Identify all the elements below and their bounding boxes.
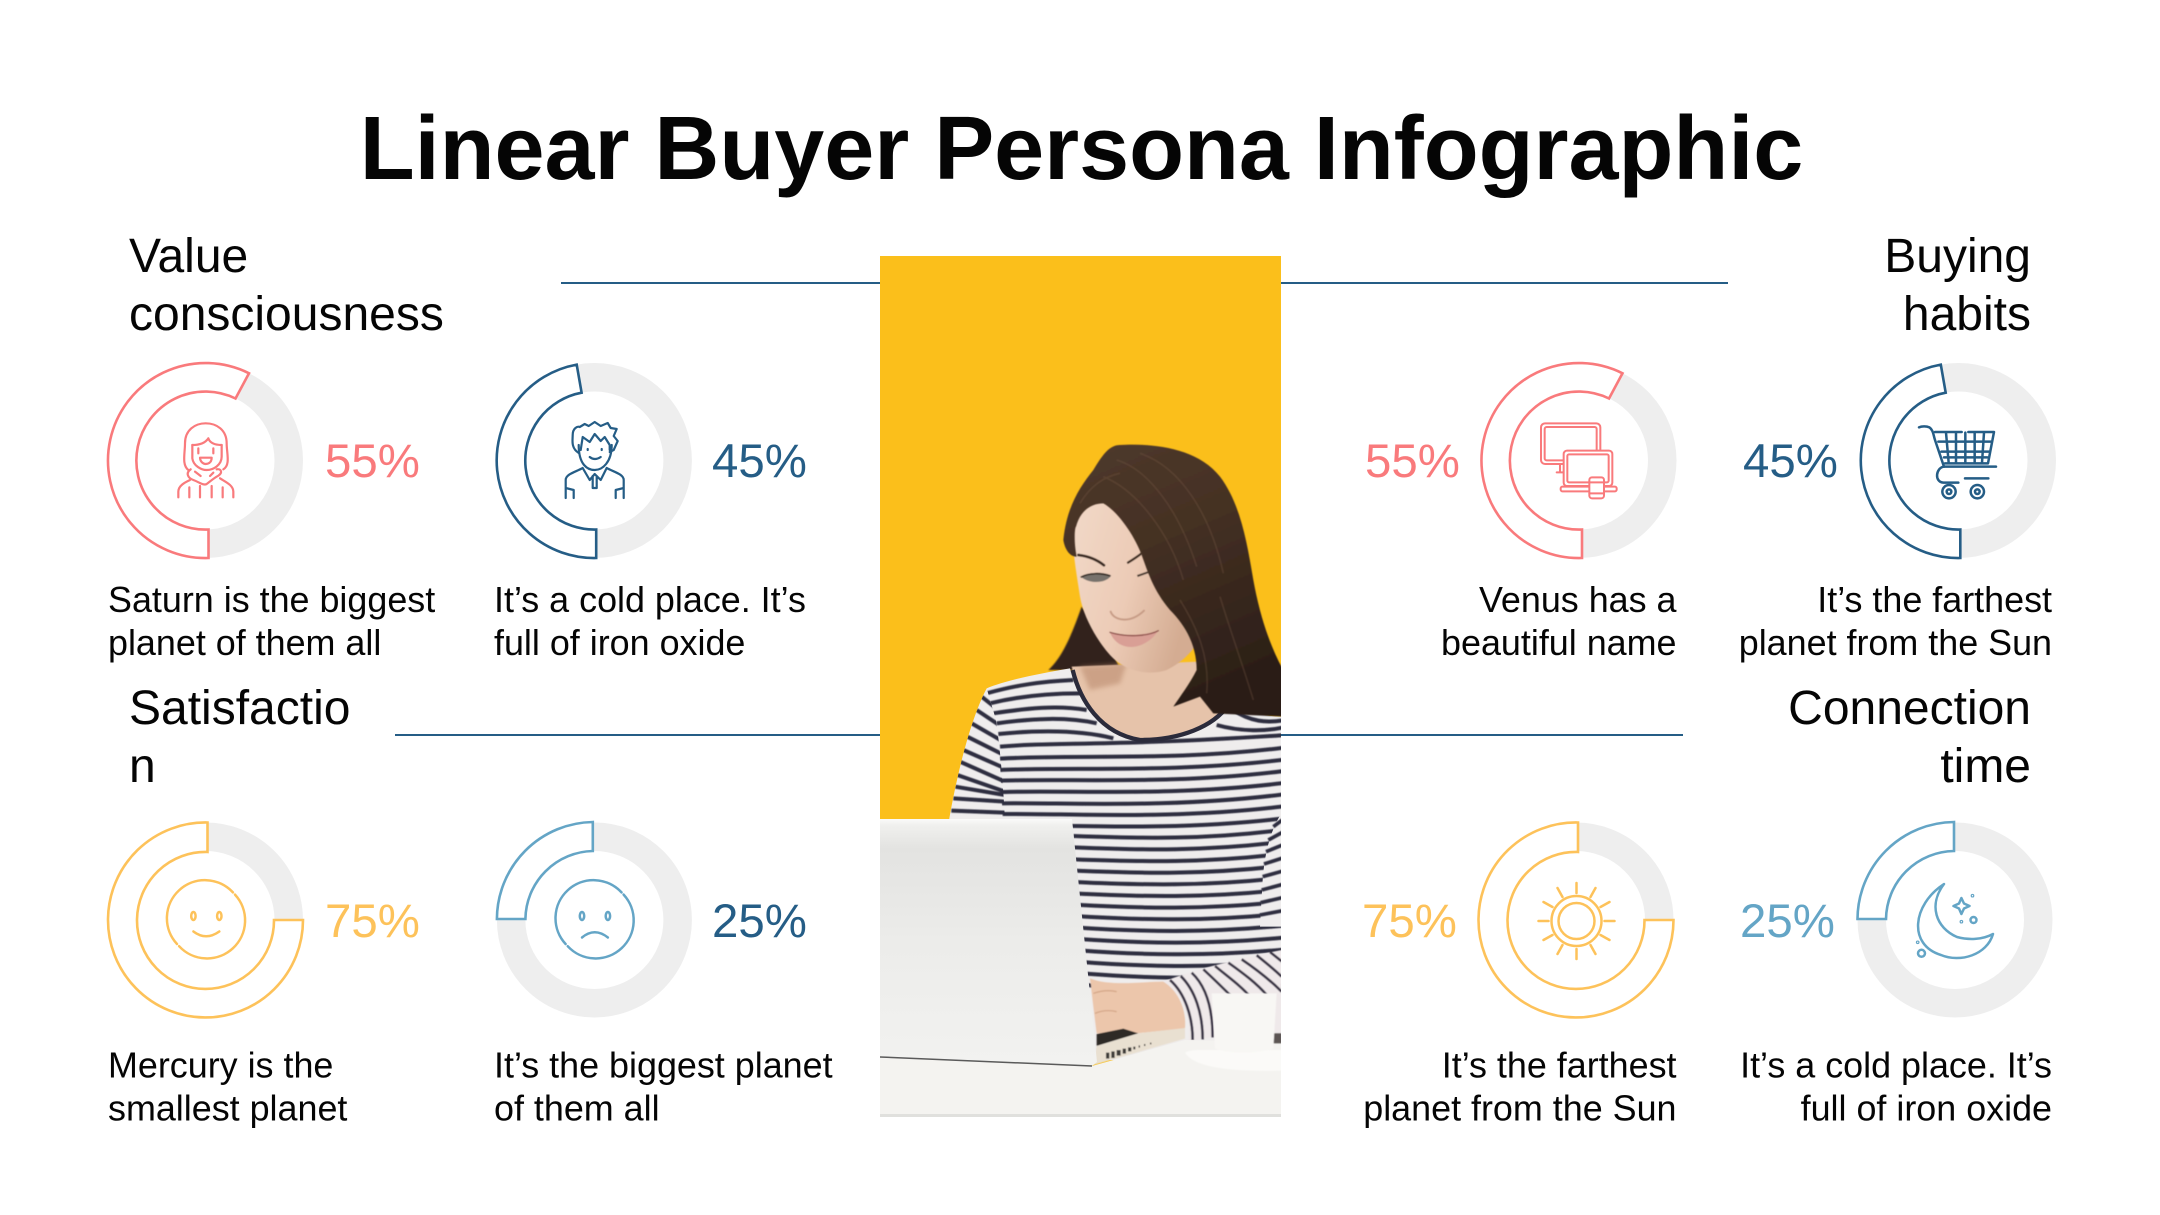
panel: value consciousness [108,230,880,663]
heading: buying habits [1884,230,2031,341]
donut: 25% sky [497,822,678,1003]
value: 55%: 55% [325,435,420,488]
description [1441,580,1677,663]
donut: 75% gold [108,822,303,1017]
icon: devices [1541,423,1617,498]
value: 55%: 55% [1365,435,1460,488]
icon: sun [1538,883,1614,959]
icon: smiling face [167,880,245,958]
photo: woman working at a laptop on yellow background [880,256,1287,1117]
icon: moon and stars [1917,884,1993,958]
value: 75%: 75% [325,895,420,948]
heading: satisfaction: Satisfactio [129,682,350,735]
description: planet from the Sun [1363,1088,1676,1128]
heading: connection time [1788,682,2031,793]
description: of them all [494,1088,660,1128]
description [108,580,435,663]
description: Mercury is the [108,1046,333,1086]
donut: 45% navy [1861,365,2042,558]
donut: 45% navy [497,365,678,558]
heading: satisfaction [129,682,350,793]
description: beautiful name [1441,623,1676,663]
icon: shopping cart [1919,426,1996,498]
heading: value consciousness [129,230,444,341]
donut: 75% gold [1478,822,1674,1017]
description [494,580,806,663]
description: planet of them all [108,623,381,663]
description: It’s a cold place. It’s [494,580,806,620]
description: planet from the Sun [1739,623,2052,663]
heading: buying habits: habits [1903,288,2031,341]
description: full of iron oxide [494,623,745,663]
connector line [561,282,880,284]
icon: woman [178,423,233,497]
description: It’s the biggest planet [494,1046,833,1086]
description: smallest planet [108,1088,347,1128]
value: 25%: 25% [1740,895,1835,948]
icon: man [566,422,624,498]
heading: buying habits: Buying [1884,230,2031,283]
description: Venus has a [1479,580,1677,620]
donut: 55% coral [108,363,289,558]
panel: connection time [1281,682,2052,1128]
description: Saturn is the biggest [108,580,435,620]
coffee cup and saucer [1212,992,1281,1044]
value: 45%: 45% [712,435,807,488]
donut: 25% sky [1858,822,2038,1003]
description [494,1046,833,1128]
connector line [1281,734,1683,736]
description [1740,1046,2052,1128]
table [880,1040,1281,1115]
heading: connection time: Connection [1788,682,2031,735]
description: It’s a cold place. It’s [1740,1046,2052,1086]
laptop lid [880,819,1097,1066]
description [1739,580,2052,663]
value: 45%: 45% [1743,435,1838,488]
heading: satisfaction: n [129,740,156,793]
description [108,1046,347,1128]
description: It’s the farthest [1442,1046,1677,1086]
right upper arm [1260,816,1281,927]
description [1363,1046,1677,1128]
heading: value consciousness: consciousness [129,288,444,341]
panel: buying habits [1281,230,2052,663]
description: full of iron oxide [1801,1088,2052,1128]
value: 75%: 75% [1362,895,1457,948]
description: It’s the farthest [1817,580,2052,620]
value: 25%: 25% [712,895,807,948]
heading: connection time: time [1940,740,2031,793]
heading: value consciousness: Value [129,230,248,283]
connector line [1281,282,1728,284]
panel: satisfaction [108,682,880,1128]
icon: sad face [556,880,634,958]
title: Linear Buyer Persona Infographic [360,99,1803,199]
connector line [395,734,880,736]
donut: 55% coral [1481,363,1662,558]
